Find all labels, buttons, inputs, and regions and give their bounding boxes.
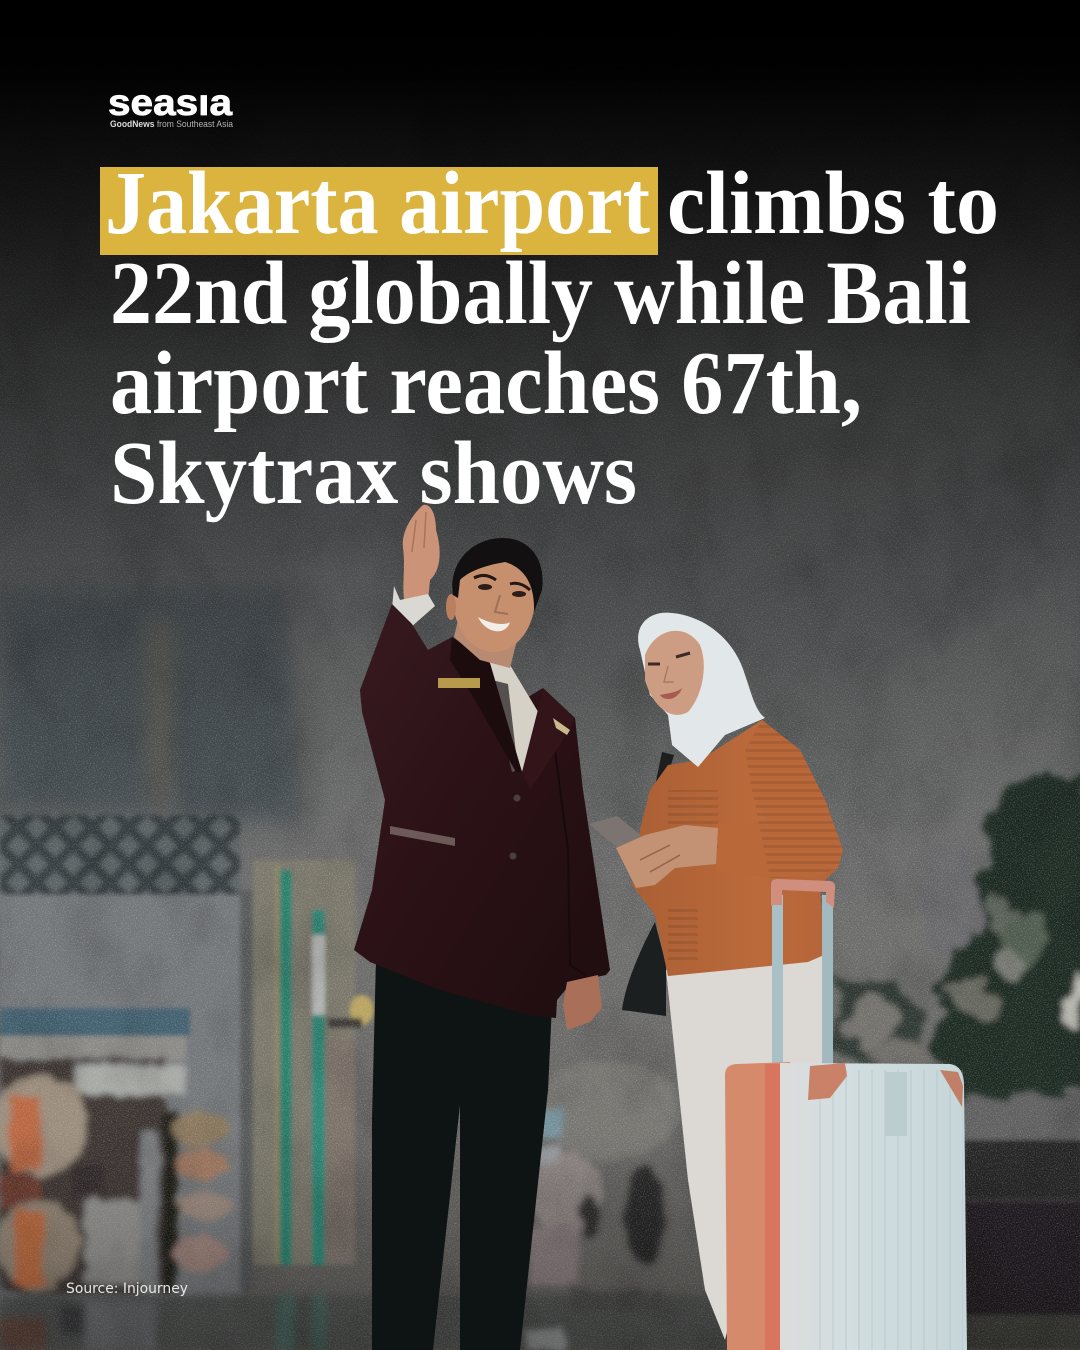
trousers (372, 958, 552, 1350)
distant travellers (525, 1060, 680, 1350)
hijab (638, 613, 765, 767)
name badge (438, 678, 480, 688)
title line 1: Jakarta airport (105, 154, 650, 253)
face (453, 544, 535, 652)
right seating (963, 1092, 1080, 1350)
suit jacket (354, 604, 610, 1018)
sleeve edge shadow (553, 735, 585, 975)
logo: seasia: seasıa (108, 82, 232, 123)
jacket pocket (390, 826, 455, 846)
eyes (648, 653, 690, 664)
left shop wall and storefront (0, 815, 374, 1305)
lower hand (563, 975, 602, 1030)
smile (478, 617, 510, 631)
phone (589, 816, 642, 850)
handbag (622, 922, 666, 1016)
face (645, 631, 704, 715)
plant (835, 775, 1080, 1092)
shirt and tie (478, 660, 540, 772)
right lapel (522, 690, 575, 790)
shop displays: garments and flowers (0, 1060, 233, 1295)
raised hand (403, 505, 440, 605)
bag strap (648, 752, 674, 820)
bottom dark gradient (0, 1130, 1080, 1350)
person: airport staff in burgundy suit (354, 505, 610, 1350)
ear (446, 594, 456, 620)
ceiling columns (0, 100, 1080, 930)
sweater (632, 720, 843, 976)
suitcase (725, 879, 967, 1350)
hair (452, 538, 543, 612)
title (100, 154, 999, 523)
title line 1 continued: climbs to (667, 154, 999, 253)
nose (664, 666, 674, 682)
white shell (780, 1063, 967, 1350)
hands (616, 825, 718, 888)
sweater ribbing (668, 790, 718, 850)
eyebrows (474, 575, 530, 590)
nose shadow (495, 595, 508, 614)
logo tagline: GoodNews from Southeast Asia (110, 119, 234, 130)
buttons (514, 794, 520, 802)
lapel pin (553, 718, 570, 735)
smile (660, 688, 682, 699)
person: traveller in orange sweater and hijab (589, 613, 843, 1340)
title highlight (100, 167, 658, 255)
shirt cuff (391, 586, 435, 628)
neck (454, 620, 517, 668)
top dark gradient (0, 0, 1080, 860)
white trousers (666, 945, 828, 1340)
title line 3: airport reaches 67th, (110, 334, 862, 433)
handle (771, 879, 835, 1065)
source credit: Source: Injourney (66, 1281, 188, 1297)
sweater sleeve (716, 720, 843, 878)
corner guards (808, 1063, 847, 1100)
title line 4: Skytrax shows (110, 424, 637, 523)
eyes (478, 584, 492, 590)
zip band (765, 1064, 781, 1350)
title line 2: 22nd globally while Bali (110, 244, 971, 343)
orange shell (725, 1062, 790, 1350)
floor reflections (0, 1295, 730, 1350)
grip panel (885, 1072, 907, 1136)
